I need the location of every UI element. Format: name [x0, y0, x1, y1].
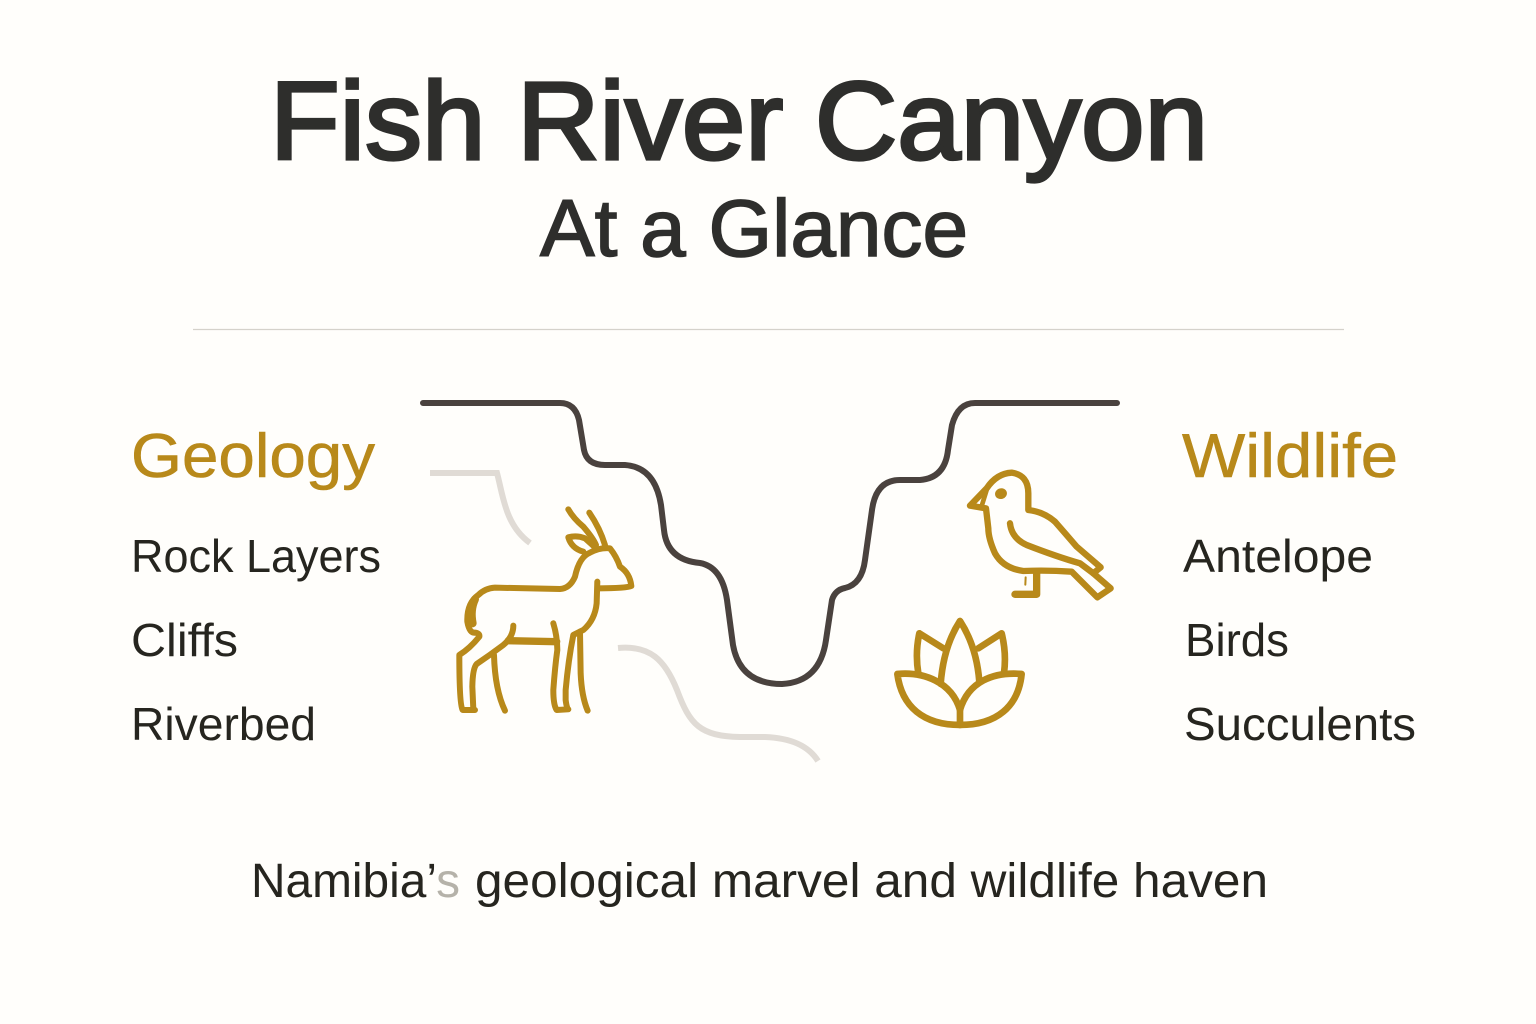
tagline: Namibia’s: [251, 855, 460, 908]
canyon profile line: [423, 403, 1117, 684]
upper river stroke: [430, 473, 530, 543]
title: Fish River Canyon: [270, 60, 1208, 183]
icon: antelope: [459, 509, 631, 711]
item: riverbed: Riverbed: [131, 698, 316, 750]
panel: wildlife: [1182, 422, 1416, 750]
icon: bird: [970, 473, 1111, 597]
item: cliffs: Cliffs: [131, 614, 238, 666]
item: antelope: Antelope: [1183, 530, 1373, 582]
heading: geology: Geology: [131, 422, 375, 491]
subtitle: At a Glance: [540, 184, 968, 274]
tagline: geological marvel and wildlife haven: [475, 855, 1268, 908]
panel: geology: [131, 422, 381, 750]
icon: succulent: [897, 621, 1022, 725]
lower river stroke: [618, 648, 818, 761]
item: birds: Birds: [1185, 614, 1289, 666]
item: succulents: Succulents: [1184, 698, 1416, 750]
heading: wildlife: Wildlife: [1182, 422, 1398, 491]
item: rock layers: Rock Layers: [131, 530, 381, 582]
